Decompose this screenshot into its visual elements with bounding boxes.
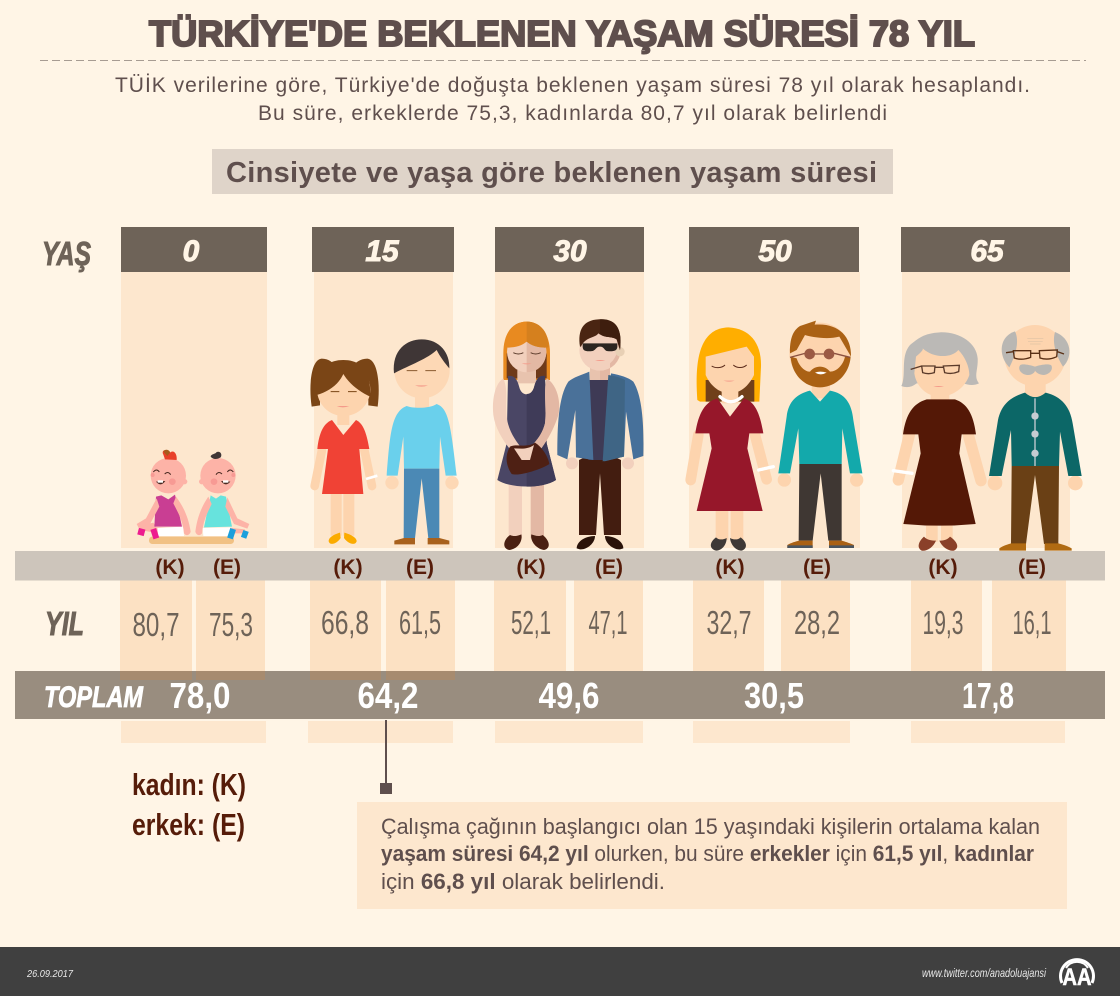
gender band: (E) — [213, 556, 241, 579]
gender band: (E) — [595, 556, 623, 579]
icon: woman 50 — [691, 327, 773, 551]
lower column strips — [121, 721, 1065, 743]
subtitle banner — [212, 149, 893, 194]
intro text: Bu süre, erkeklerde 75,3, kadınlarda 80,7 yıl olarak belirlendi — [258, 102, 887, 125]
year values: 61,5 — [399, 604, 441, 641]
year column backgrounds — [120, 580, 1066, 680]
figures: babies and teenagers — [137, 339, 459, 544]
age headers: 30 — [553, 235, 587, 268]
icon: babies — [137, 450, 249, 544]
gender band: (K) — [333, 556, 363, 579]
callout — [357, 802, 1067, 909]
year values: 16,1 — [1012, 604, 1052, 641]
year label: YIL — [45, 605, 84, 642]
gender band: (K) — [928, 556, 958, 579]
legend: kadın: (K) — [132, 767, 246, 802]
age headers: 15 — [365, 235, 400, 268]
age column backgrounds — [121, 272, 1070, 548]
gender band: (E) — [406, 556, 434, 579]
icon: man 30 — [557, 319, 643, 549]
year values: 80,7 — [132, 606, 180, 643]
year values: 52,1 — [511, 604, 551, 641]
footer: 26.09.2017 — [26, 968, 74, 980]
title: TÜRKİYE'DE BEKLENEN YAŞAM SÜRESİ 78 YIL — [149, 13, 975, 54]
age label: YAŞ — [42, 235, 91, 272]
year values: 66,8 — [321, 604, 369, 641]
gender band: (E) — [803, 556, 831, 579]
age headers: 0 — [183, 235, 200, 268]
total band: 30,5 — [744, 675, 804, 716]
icon: woman 30 — [493, 322, 559, 550]
total band: 17,8 — [962, 675, 1014, 716]
legend — [132, 767, 246, 842]
total band: TOPLAM — [44, 681, 144, 714]
year values: 47,1 — [588, 604, 628, 641]
callout: yaşam süresi 64,2 yıl olurken, bu süre erkekler için 61,5 yıl, kadınlar — [381, 841, 1034, 866]
footer — [0, 947, 1120, 996]
icon: teenage boy — [385, 339, 459, 544]
figures: adults 30 and 50 — [493, 319, 863, 551]
year values: 75,3 — [209, 606, 253, 643]
icon: teenage girl — [310, 359, 379, 544]
age headers — [121, 227, 1070, 272]
year values — [132, 604, 1052, 643]
icon: man 50 — [778, 321, 863, 548]
age headers: 50 — [758, 235, 792, 268]
icon: old man — [988, 325, 1083, 551]
total band: 64,2 — [358, 675, 418, 716]
callout: Çalışma çağının başlangıcı olan 15 yaşındaki kişilerin ortalama kalan — [381, 814, 1040, 839]
total band: 49,6 — [538, 675, 600, 716]
intro text: TÜİK verilerine göre, Türkiye'de doğuşta beklenen yaşam süresi 78 yıl olarak hesaplandı. — [115, 74, 1030, 97]
gender band: (K) — [516, 556, 546, 579]
icon: old woman — [893, 332, 981, 551]
intro text — [115, 74, 1030, 125]
icon: AA logo: AA — [1062, 964, 1092, 991]
year values: 19,3 — [922, 604, 964, 641]
callout: için 66,8 yıl olarak belirlendi. — [381, 869, 665, 894]
connector — [380, 720, 392, 794]
year values: 32,7 — [706, 604, 752, 641]
year values: 28,2 — [794, 604, 840, 641]
gender band: (K) — [155, 556, 185, 579]
total band — [15, 671, 1105, 719]
age headers: 65 — [970, 235, 1005, 268]
subtitle banner: Cinsiyete ve yaşa göre beklenen yaşam süresi — [226, 157, 877, 189]
legend: erkek: (E) — [132, 807, 245, 842]
footer: www.twitter.com/anadoluajansi — [922, 966, 1046, 980]
total band: 78,0 — [170, 675, 230, 716]
gender band: (K) — [715, 556, 745, 579]
figures: seniors 65 — [893, 325, 1083, 551]
gender band — [15, 551, 1105, 580]
gender band: (E) — [1018, 556, 1046, 579]
